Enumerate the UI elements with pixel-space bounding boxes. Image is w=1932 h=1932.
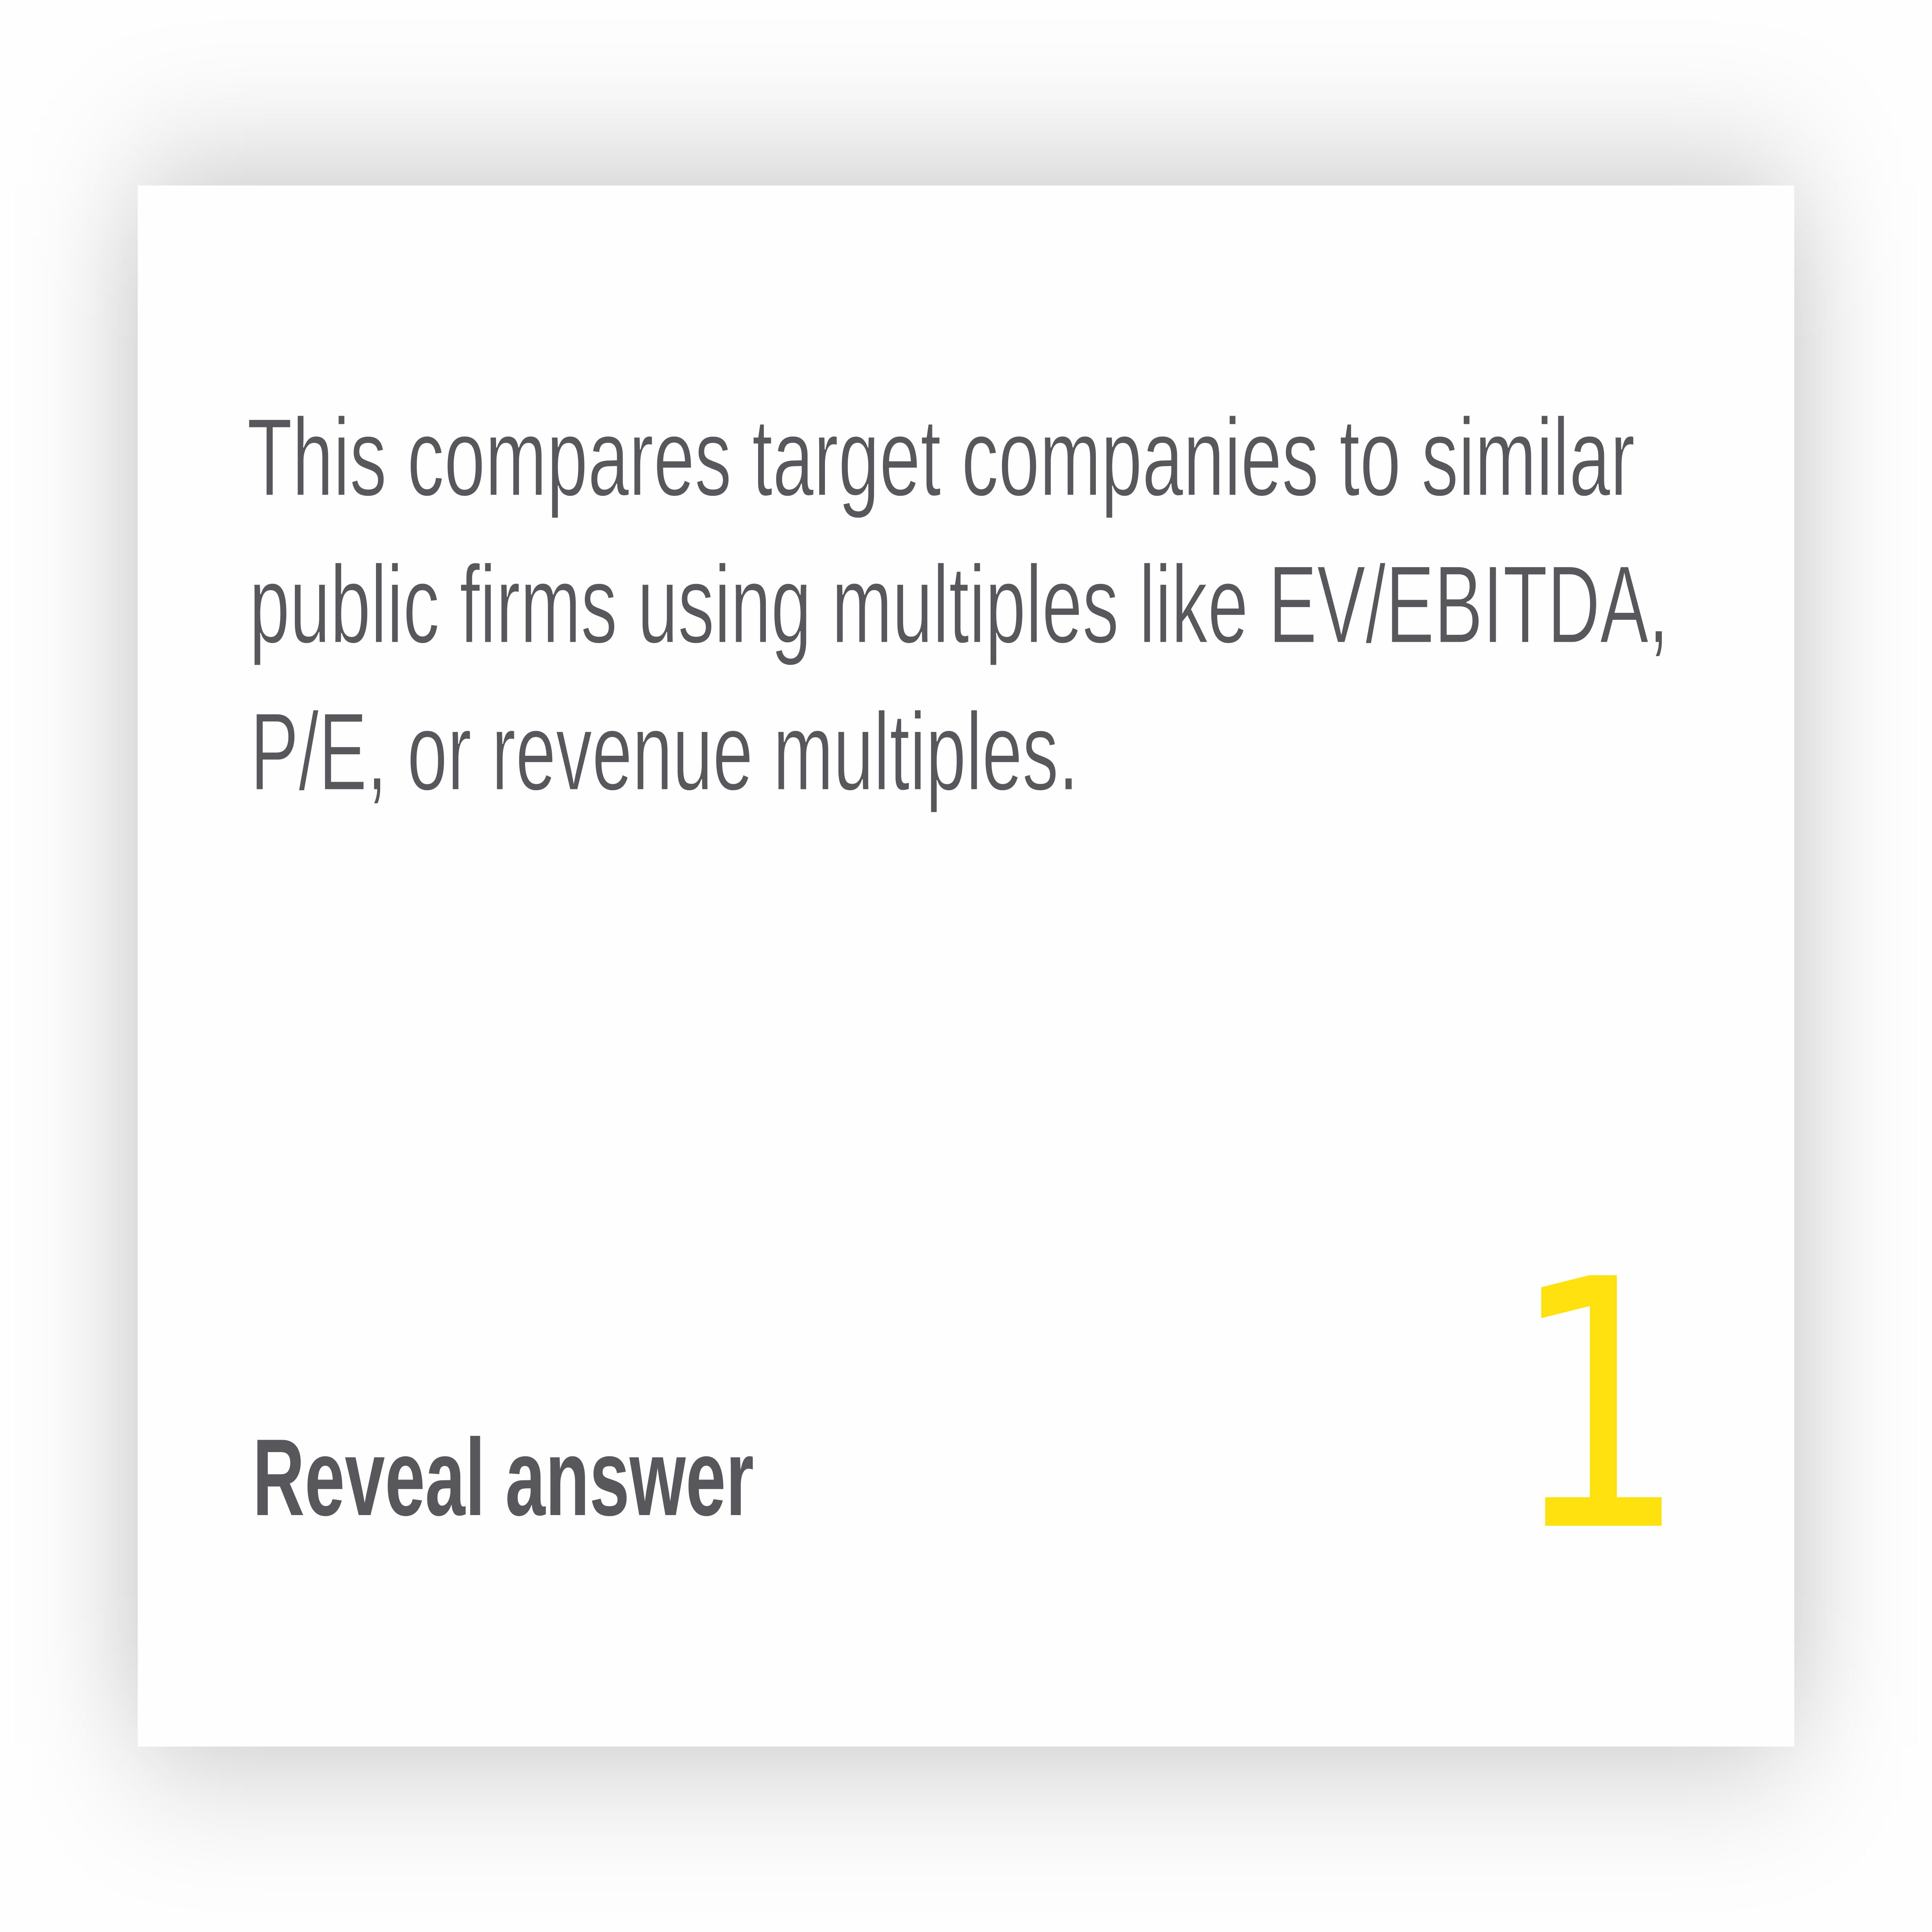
text block: description: public firms using multiples like EV/EBITDA, [249, 543, 1669, 666]
text block: description [247, 396, 1669, 813]
panel: white card with soft shadow [138, 185, 1794, 1747]
button label: reveal answer: Reveal answer [253, 1416, 754, 1538]
text block: description: P/E, or revenue multiples. [250, 690, 1078, 813]
text block: description: This compares target companies to similar [247, 396, 1635, 519]
card number: 1 [1511, 1207, 1687, 1607]
